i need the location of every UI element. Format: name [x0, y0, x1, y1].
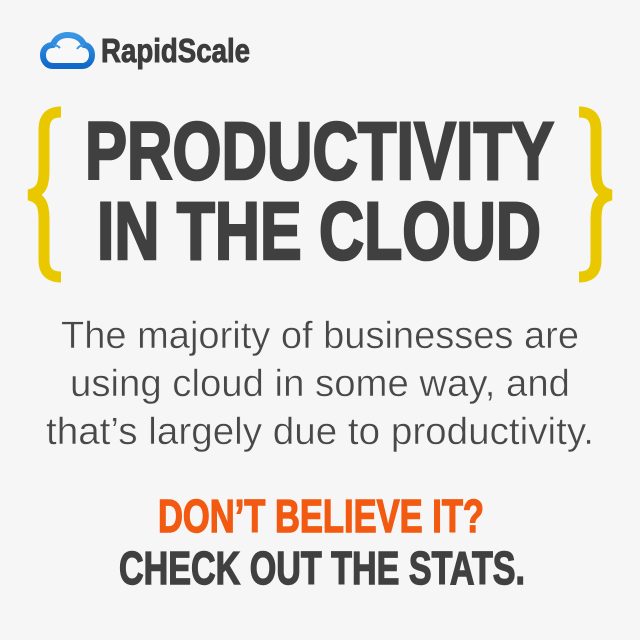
intro text block: that’s largely due to productivity.	[46, 411, 594, 453]
intro text block	[46, 315, 594, 453]
intro text block: using cloud in some way, and	[70, 363, 570, 405]
logo wordmark: RapidScale	[101, 32, 250, 69]
right curly bracket	[579, 112, 611, 277]
icon: RapidScale cloud logo	[43, 35, 92, 66]
title	[85, 106, 554, 277]
left curly bracket	[29, 112, 61, 277]
intro text block: The majority of businesses are	[61, 315, 579, 357]
callout: orange question: DON’T BELIEVE IT?	[158, 490, 484, 542]
